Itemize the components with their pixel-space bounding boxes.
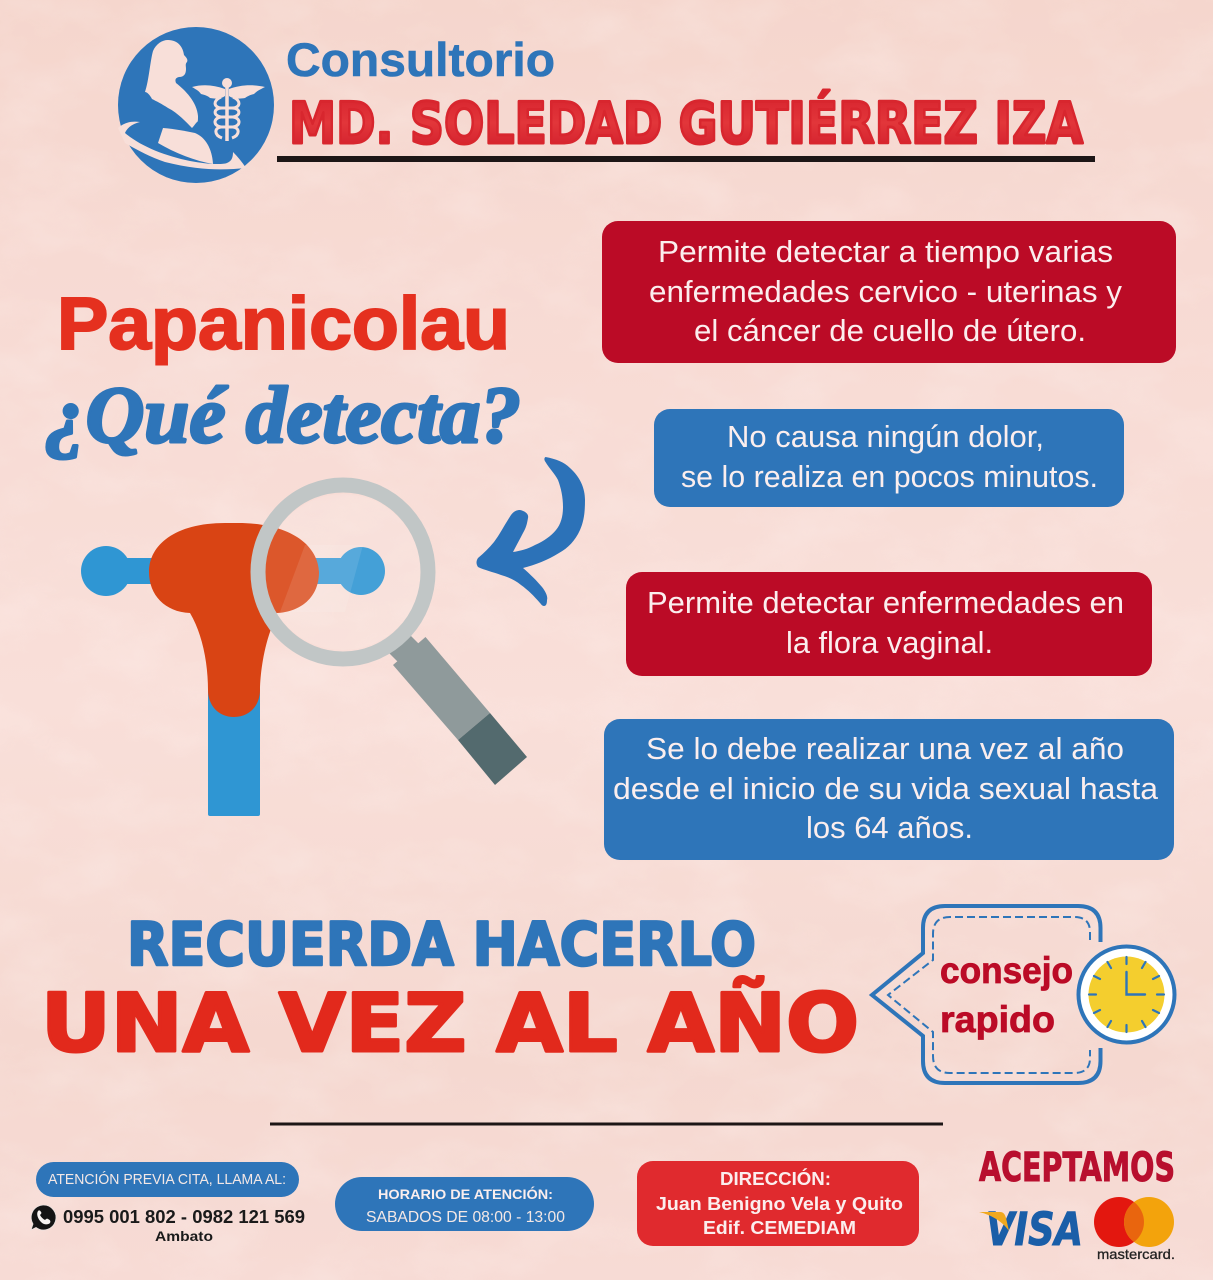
heading: Papanicolau: Papanicolau [57,282,510,365]
header rule [277,156,1095,162]
contact: city: Ambato [155,1228,213,1244]
panel: no pain [654,409,1124,507]
panel: yearly test: Se lo debe realizar una vez al año [646,731,1124,766]
illustration: uterus under magnifier [81,485,527,816]
address box [637,1161,919,1246]
panel: vaginal flora: la flora vaginal. [786,625,993,660]
callout: consejo rapido: consejo [940,950,1073,991]
reminder heading: RECUERDA HACERLO [127,910,756,980]
panel: early detection [602,221,1176,363]
magnifier neck [388,634,420,664]
panel: vaginal flora [626,572,1152,676]
logo: pregnant woman and caduceus [118,27,274,183]
panel: early detection: Permite detectar a tiempo varias [658,234,1113,269]
callout: consejo rapido [872,906,1100,1083]
panel: yearly test [604,719,1174,860]
contact: phone numbers: 0995 001 802 - 0982 121 569 [63,1207,305,1227]
panel: no pain: No causa ningún dolor, [727,419,1044,454]
lens highlight [266,528,385,613]
panel: yearly test: desde el inicio de su vida sexual hasta [613,771,1159,806]
tubes and ovaries [81,546,385,816]
icon: whatsapp [31,1205,56,1230]
magnifier ring [258,485,428,659]
heading: Que detecta: ¿Qué detecta? [45,372,521,460]
reminder emphasis: UNA VEZ AL AÑO [41,976,859,1070]
contact: appointment pill: ATENCIÓN PREVIA CITA, LLAMA AL: [48,1171,286,1188]
woman belly [158,128,213,164]
panel: yearly test: los 64 años. [806,810,973,845]
callout: consejo rapido: rapido [940,999,1055,1040]
header: Consultorio: Consultorio [286,33,555,86]
panel: early detection: el cáncer de cuello de útero. [694,313,1086,348]
footer rule [270,1122,943,1126]
contact: appointment pill [36,1162,299,1197]
arrow [476,457,585,606]
address box: Edif. CEMEDIAM [703,1218,856,1238]
caduceus [192,78,265,141]
icon: clock [1078,946,1174,1042]
uterus [149,523,319,717]
logo: visa: VISA [986,1203,1083,1256]
woman upper body [145,40,198,128]
panel: vaginal flora: Permite detectar enfermedades en [647,585,1124,620]
swoosh [118,122,246,169]
magnifier handle [393,637,527,785]
logo: mastercard [1094,1197,1175,1262]
hours pill: SABADOS DE 08:00 - 13:00 [366,1209,565,1226]
address box: Juan Benigno Vela y Quito [656,1194,903,1214]
address box: DIRECCIÓN: [720,1168,831,1189]
hours pill [335,1177,594,1231]
logo: mastercard: mastercard. [1097,1246,1175,1262]
hours pill: HORARIO DE ATENCIÓN: [378,1185,553,1202]
panel: no pain: se lo realiza en pocos minutos. [681,459,1098,494]
panel: early detection: enfermedades cervico - uterinas y [649,274,1123,309]
